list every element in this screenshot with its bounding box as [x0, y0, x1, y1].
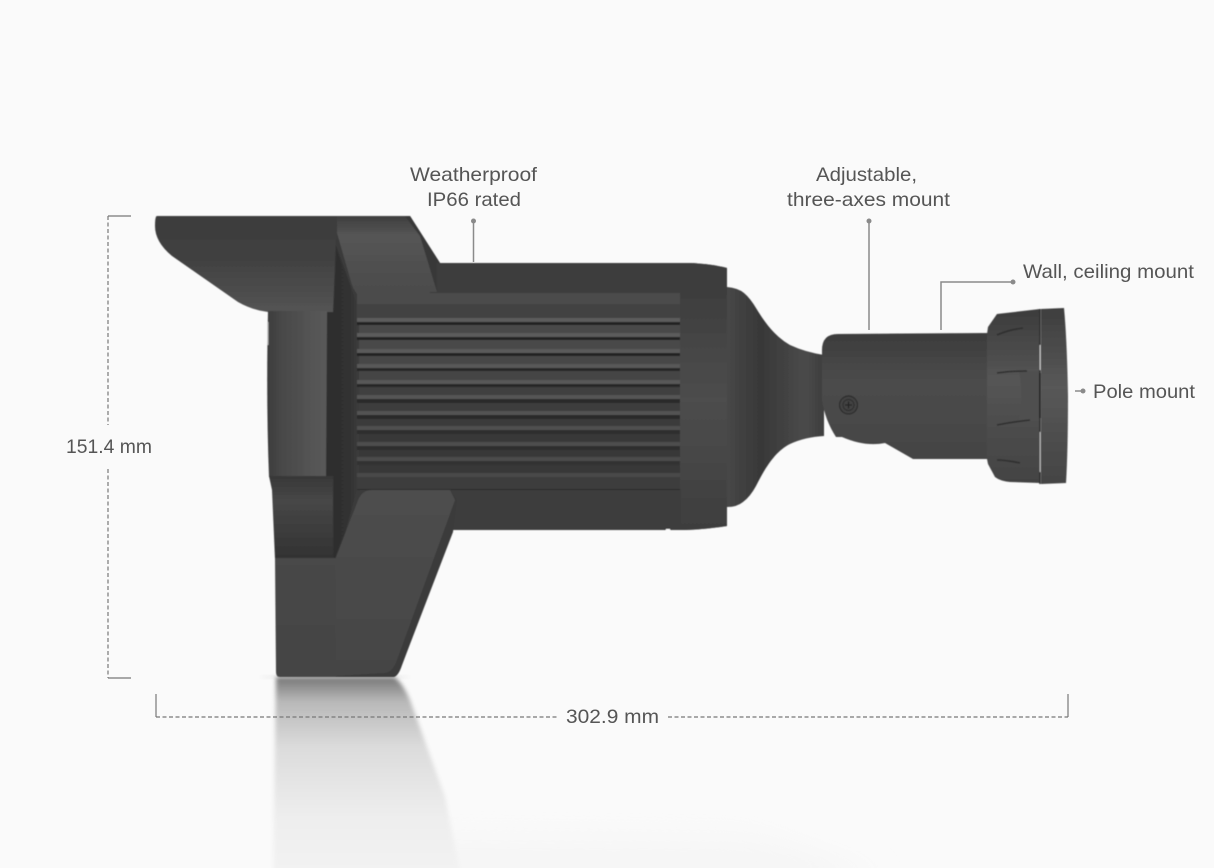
lower bracket — [336, 490, 457, 677]
width label: 302.9 mm — [566, 706, 659, 728]
camera body backing — [326, 216, 727, 677]
callout: adjustable mount — [787, 164, 951, 330]
height dimension line — [108, 216, 131, 678]
main body right side — [680, 293, 727, 530]
callout: adjustable mount: three-axes mount — [787, 189, 951, 211]
callout: weatherproof: Weatherproof — [410, 164, 538, 186]
body lower band — [357, 489, 681, 530]
callout: wall, ceiling mount — [941, 261, 1195, 330]
cooling fins — [357, 293, 680, 490]
neck joint — [727, 287, 824, 507]
foot — [275, 558, 337, 677]
mount base plate — [1040, 308, 1068, 484]
floor reflection — [260, 675, 880, 868]
width dimension line — [156, 694, 1068, 717]
camera — [155, 216, 1068, 677]
front ring — [267, 311, 327, 477]
sun hood — [155, 216, 337, 312]
callout: weatherproof: IP66 rated — [427, 189, 521, 211]
dark recess behind bracket — [326, 240, 357, 558]
mount arm — [822, 333, 990, 459]
callout: pole mount: Pole mount — [1093, 381, 1196, 403]
callout: adjustable mount: Adjustable, — [816, 164, 917, 186]
callout: wall, ceiling mount: Wall, ceiling mount — [1023, 261, 1195, 283]
front lower block — [269, 476, 333, 559]
callout: weatherproof — [410, 164, 538, 262]
screw — [840, 396, 858, 414]
height label: 151.4 mm — [66, 436, 152, 458]
underside notch — [666, 529, 670, 531]
upper bracket — [337, 216, 727, 302]
mount collar — [987, 309, 1040, 483]
